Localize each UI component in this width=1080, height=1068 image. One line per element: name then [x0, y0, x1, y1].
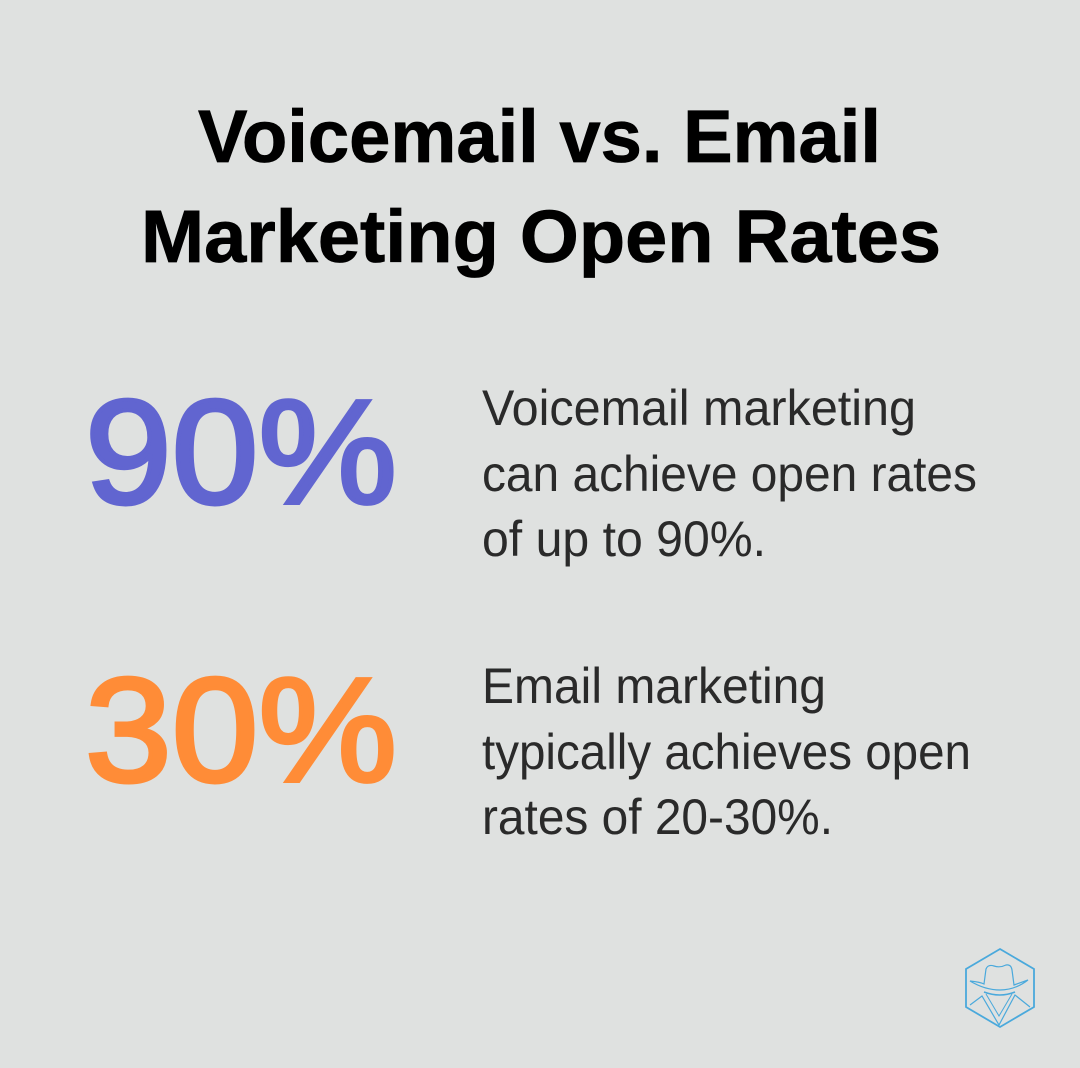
description: email: rates of 20-30%. — [482, 789, 833, 845]
stat: 90%: 90% — [85, 370, 397, 535]
title: Marketing Open Rates — [141, 195, 941, 278]
description: voicemail: Voicemail marketing — [482, 380, 916, 436]
icon: logo hexagon with spy hat — [966, 949, 1034, 1027]
description: email: typically achieves open — [482, 724, 971, 780]
stat: 30%: 30% — [85, 648, 397, 813]
description: email — [482, 658, 971, 845]
description: voicemail — [482, 380, 977, 567]
description: email: Email marketing — [482, 658, 826, 714]
title: Voicemail vs. Email — [198, 95, 881, 178]
description: voicemail: can achieve open rates — [482, 446, 977, 502]
description: voicemail: of up to 90%. — [482, 511, 766, 567]
title — [141, 95, 941, 278]
